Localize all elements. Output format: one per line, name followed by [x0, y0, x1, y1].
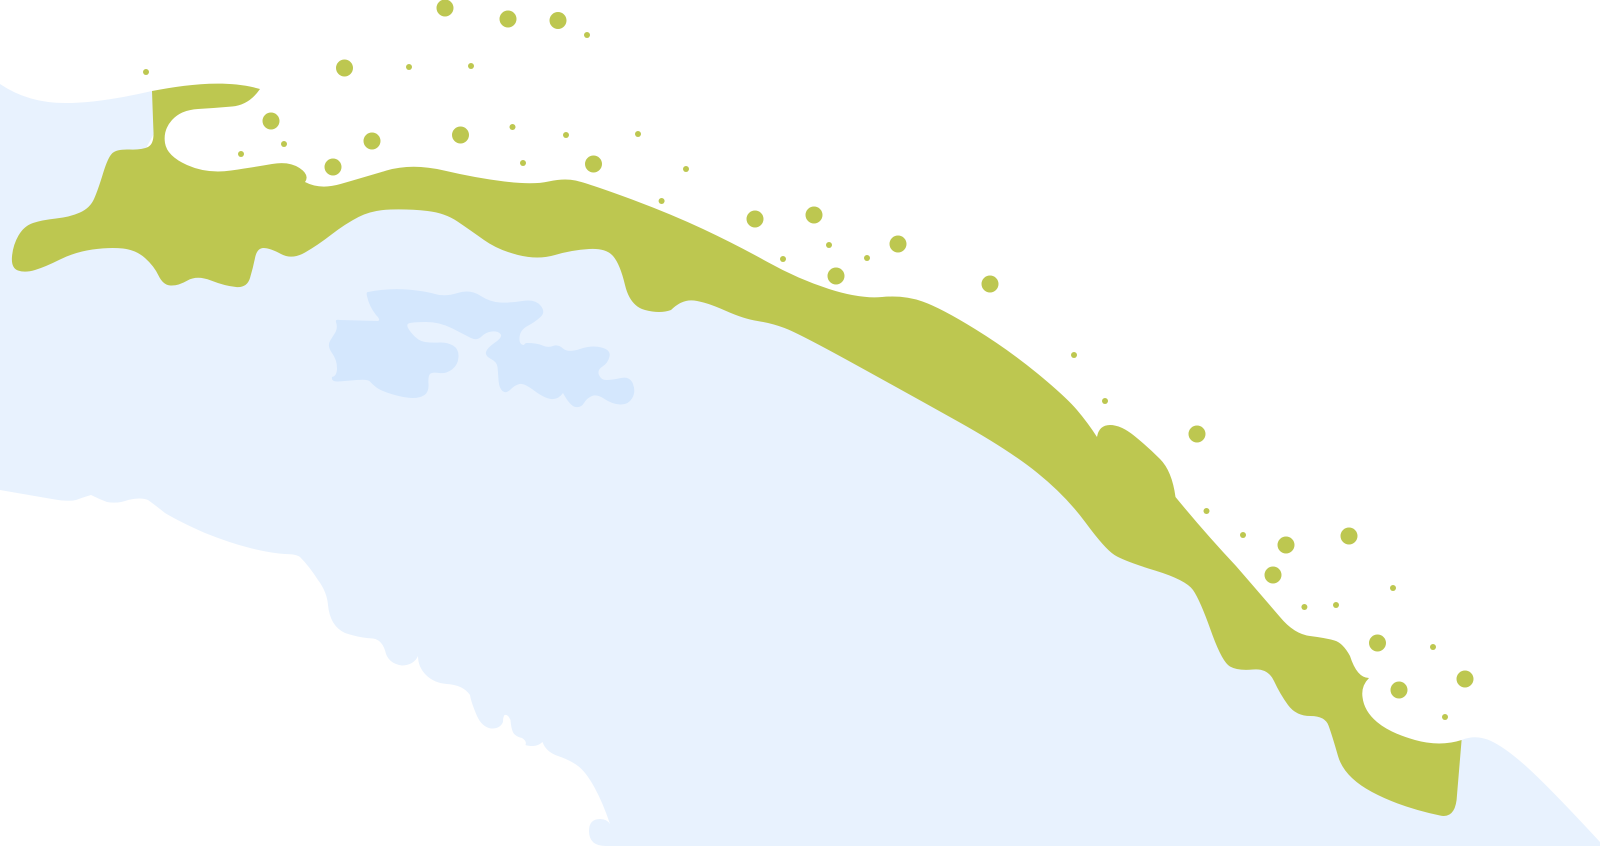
large green dots	[262, 0, 1474, 698]
small green dots	[143, 32, 1448, 720]
green coastal band	[12, 84, 1462, 816]
lake: darker blue	[329, 289, 634, 407]
